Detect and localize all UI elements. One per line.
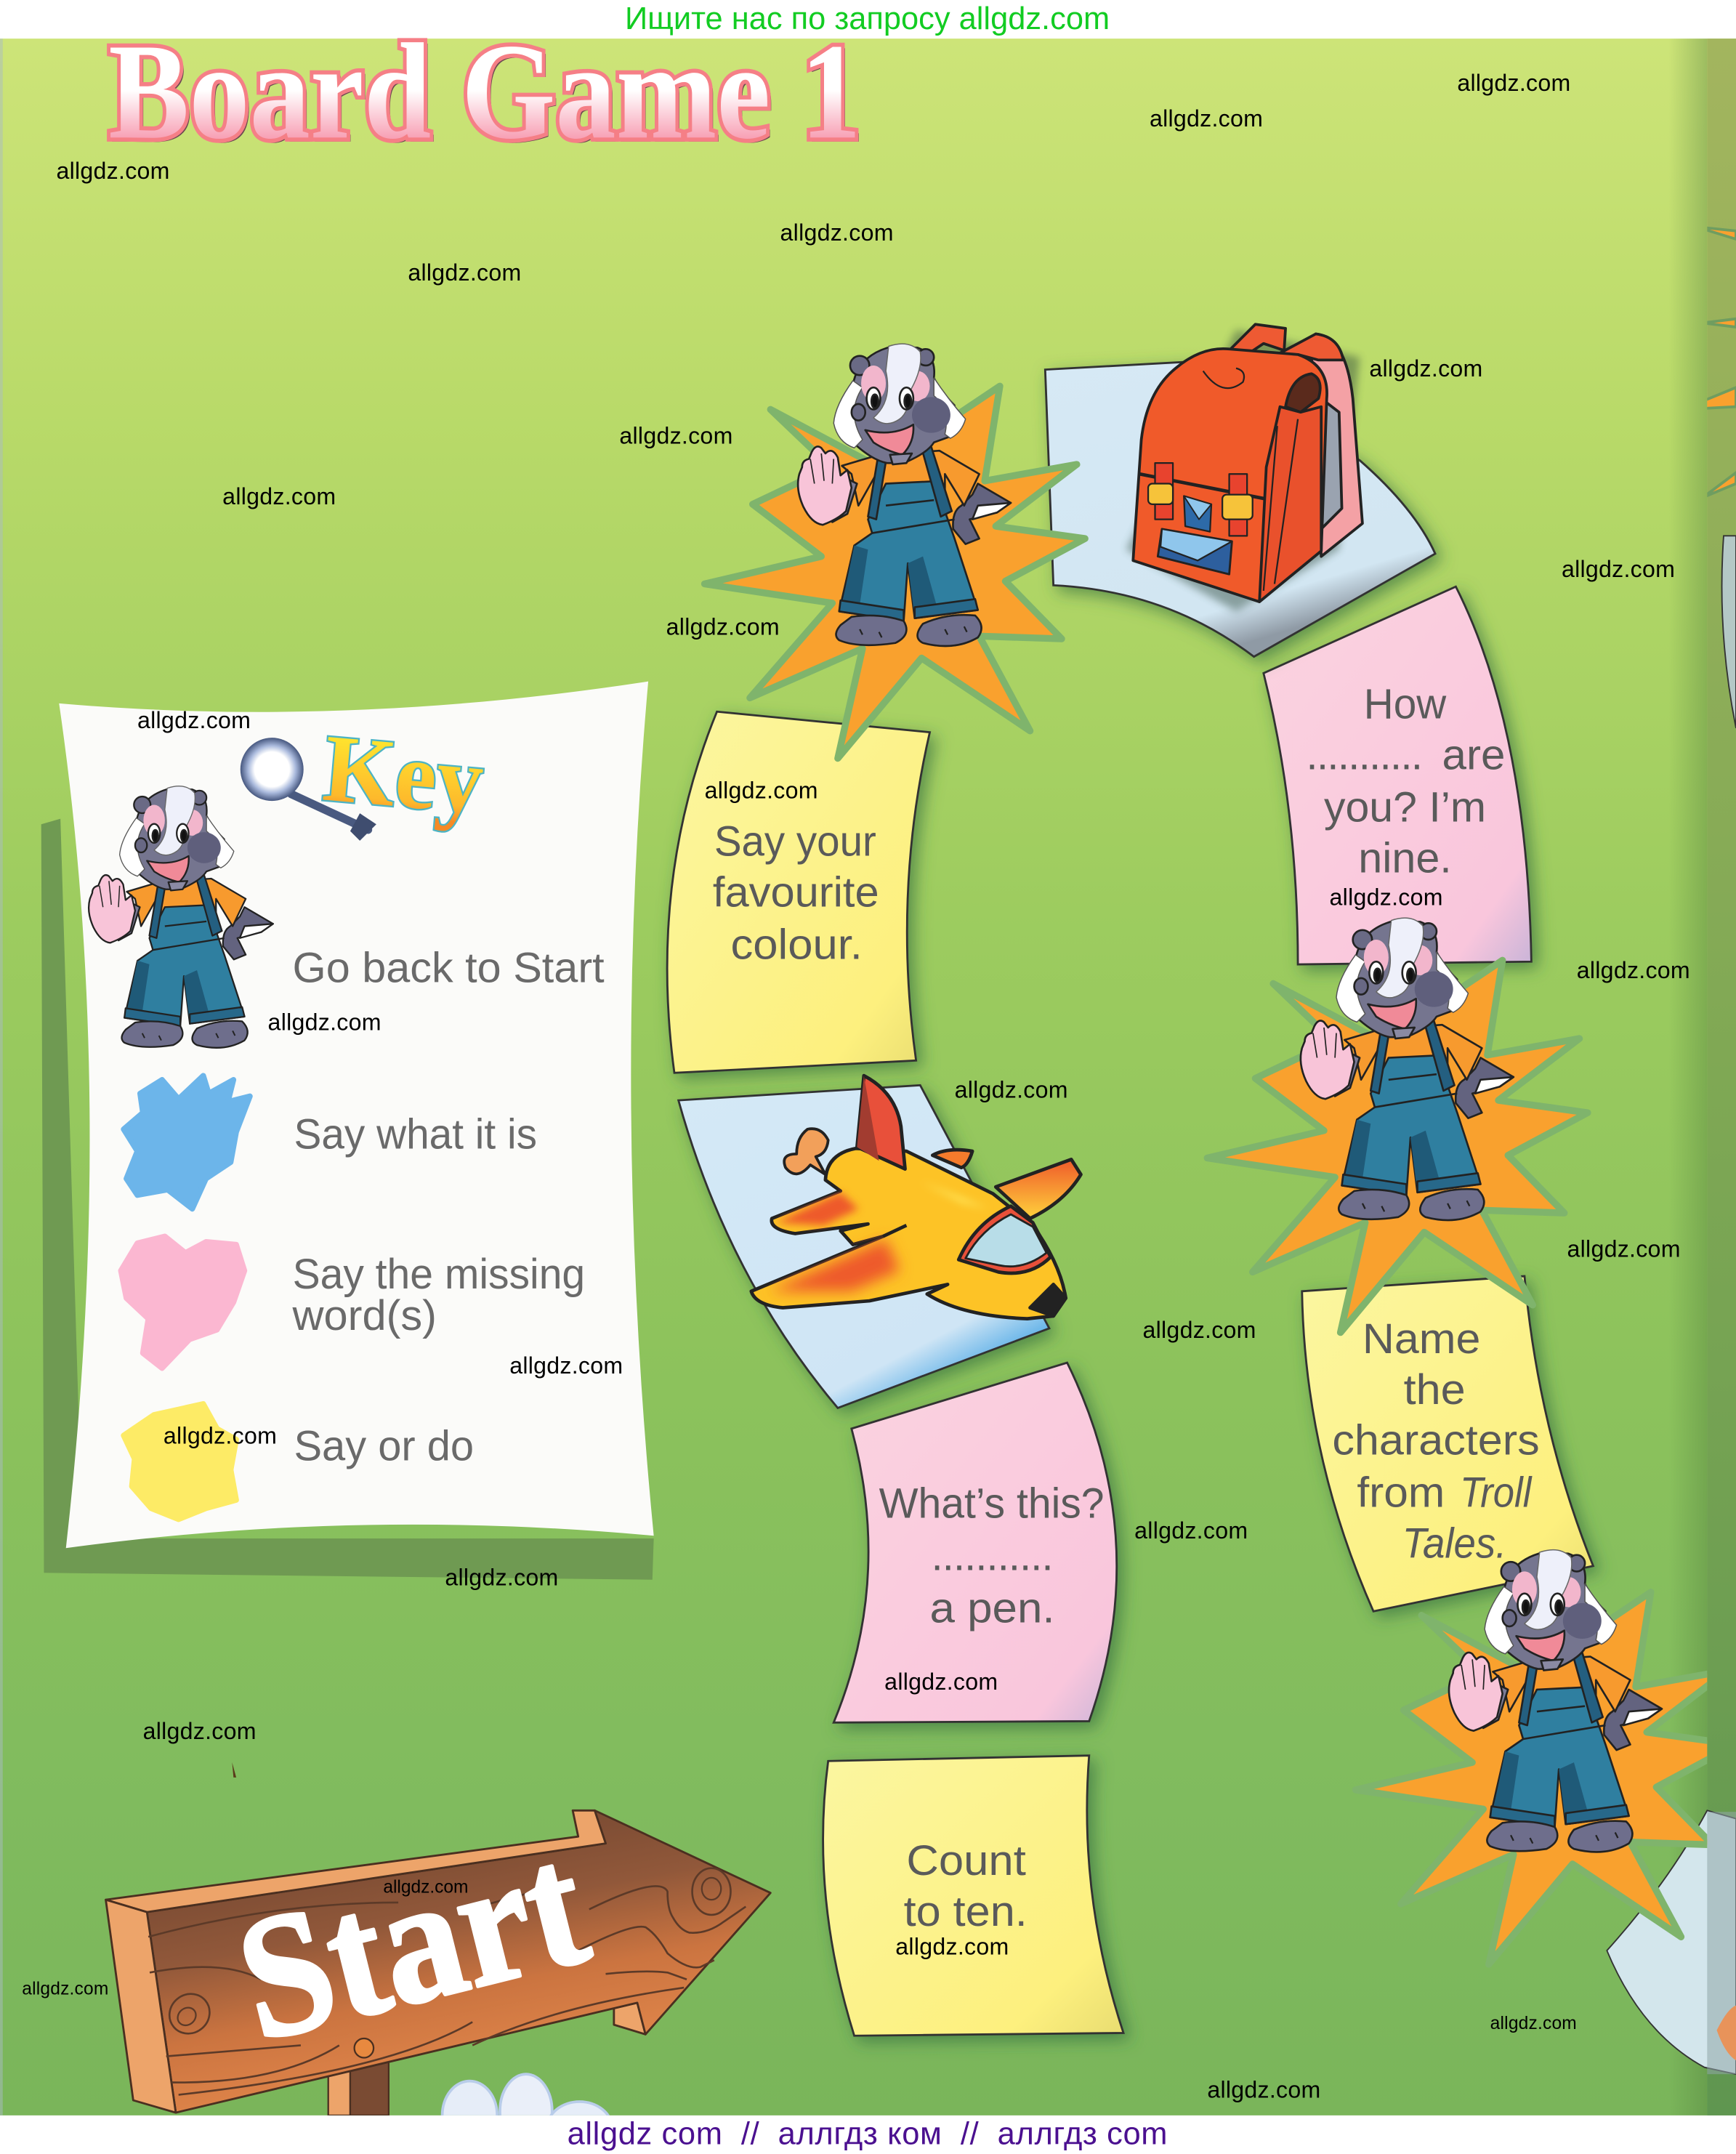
watermarks: allgdz.com	[619, 423, 732, 449]
icon: key	[241, 738, 376, 841]
card: name the characters: Tales.	[1402, 1520, 1506, 1568]
star with skunk: second	[1207, 918, 1588, 1333]
legend: say or do: Say or do	[294, 1422, 474, 1469]
card: what's this: a pen.	[930, 1584, 1055, 1631]
card: how old are you: are	[1442, 732, 1505, 779]
card: how old are you: ...........	[1306, 732, 1423, 779]
header link text: Ищите нас по запросу allgdz.com	[625, 1, 1110, 36]
watermarks: allgdz.com	[1369, 355, 1482, 382]
watermarks: allgdz.com	[1207, 2076, 1320, 2102]
card: what's this: ...........	[931, 1533, 1054, 1580]
card: say your favourite colour: colour.	[730, 921, 863, 968]
legend: say what it is	[124, 1076, 537, 1209]
icon: toy plane	[751, 1076, 1081, 1319]
title: Board Game 1: Board Game 1	[111, 18, 864, 170]
watermarks: allgdz.com	[1562, 556, 1675, 582]
legend: say the missing words	[121, 1236, 585, 1368]
card: what's this	[833, 1363, 1117, 1722]
card: what's this: What’s this?	[879, 1480, 1105, 1528]
legend: go back to start	[89, 786, 605, 1048]
watermarks: allgdz.com	[1150, 105, 1263, 132]
panel: key	[41, 682, 654, 1580]
card: name the characters: characters	[1332, 1417, 1540, 1464]
legend: say the missing words: Say the missing	[293, 1251, 585, 1298]
card: name the characters: Troll	[1460, 1469, 1533, 1517]
watermarks: allgdz.com	[163, 1423, 277, 1449]
card: say your favourite colour: favourite	[713, 869, 879, 916]
card: name the characters: Name	[1362, 1315, 1480, 1363]
watermarks: allgdz.com	[56, 158, 169, 184]
card: how old are you: nine.	[1358, 834, 1452, 882]
start label: Start	[220, 1806, 603, 2078]
footer link text: allgdz com // аллгдз ком // аллгдз com	[568, 2117, 1168, 2152]
icon: schoolbag	[1126, 324, 1362, 611]
card: how old are you: you? I’m	[1324, 783, 1486, 831]
starbursts and skunks	[705, 344, 1736, 1964]
watermarks: allgdz.com	[895, 1934, 1009, 1960]
card: count to ten: to ten.	[904, 1888, 1028, 1935]
watermarks: allgdz.com	[1577, 957, 1690, 983]
flower	[232, 1763, 610, 2115]
watermarks: allgdz.com	[1143, 1317, 1256, 1343]
watermarks: allgdz.com	[509, 1352, 623, 1379]
watermarks: allgdz.com	[445, 1564, 558, 1590]
watermarks: allgdz.com	[705, 777, 818, 803]
watermarks: allgdz.com	[1457, 70, 1570, 96]
watermarks: allgdz.com	[143, 1718, 256, 1744]
watermarks: allgdz.com	[1134, 1517, 1248, 1544]
watermarks: allgdz.com	[137, 707, 251, 733]
watermarks: allgdz.com	[222, 483, 336, 509]
panel: plane square	[679, 1076, 1081, 1408]
watermarks: allgdz.com	[884, 1669, 998, 1695]
card: name the characters: from	[1357, 1469, 1445, 1517]
card: count to ten	[823, 1756, 1123, 2036]
next page edge	[1607, 227, 1736, 2074]
legend: say or do	[124, 1404, 474, 1520]
legend: go back to start: Go back to Start	[293, 945, 605, 992]
card: name the characters: the	[1404, 1366, 1466, 1413]
card: name the characters	[1302, 1276, 1593, 1611]
legend: say the missing words: word(s)	[292, 1292, 437, 1339]
watermarks: allgdz.com	[22, 1980, 108, 1999]
watermarks: allgdz.com	[383, 1878, 469, 1897]
watermarks: allgdz.com	[666, 613, 780, 640]
card: count to ten: Count	[906, 1837, 1026, 1884]
start sign	[106, 1806, 770, 2115]
watermarks: allgdz.com	[408, 259, 521, 286]
star with skunk: third	[1355, 1550, 1736, 1964]
title: Board Game 1: Board Game 1	[108, 15, 861, 167]
card: say your favourite colour	[667, 711, 930, 1073]
watermarks: allgdz.com	[1490, 2014, 1577, 2033]
watermarks: allgdz.com	[1567, 1236, 1680, 1262]
legend: say what it is: Say what it is	[294, 1110, 537, 1158]
card: say your favourite colour: Say your	[714, 818, 876, 866]
card: how old are you: How	[1364, 681, 1447, 728]
star with skunk: first	[705, 344, 1085, 759]
watermarks: allgdz.com	[1330, 884, 1442, 911]
panel: schoolbag square	[1045, 324, 1435, 657]
watermarks: allgdz.com	[268, 1009, 381, 1036]
heading: Key: Key	[320, 714, 488, 834]
card: how old are you	[1264, 586, 1531, 964]
watermarks: allgdz.com	[780, 219, 893, 246]
watermarks: allgdz.com	[955, 1076, 1067, 1102]
